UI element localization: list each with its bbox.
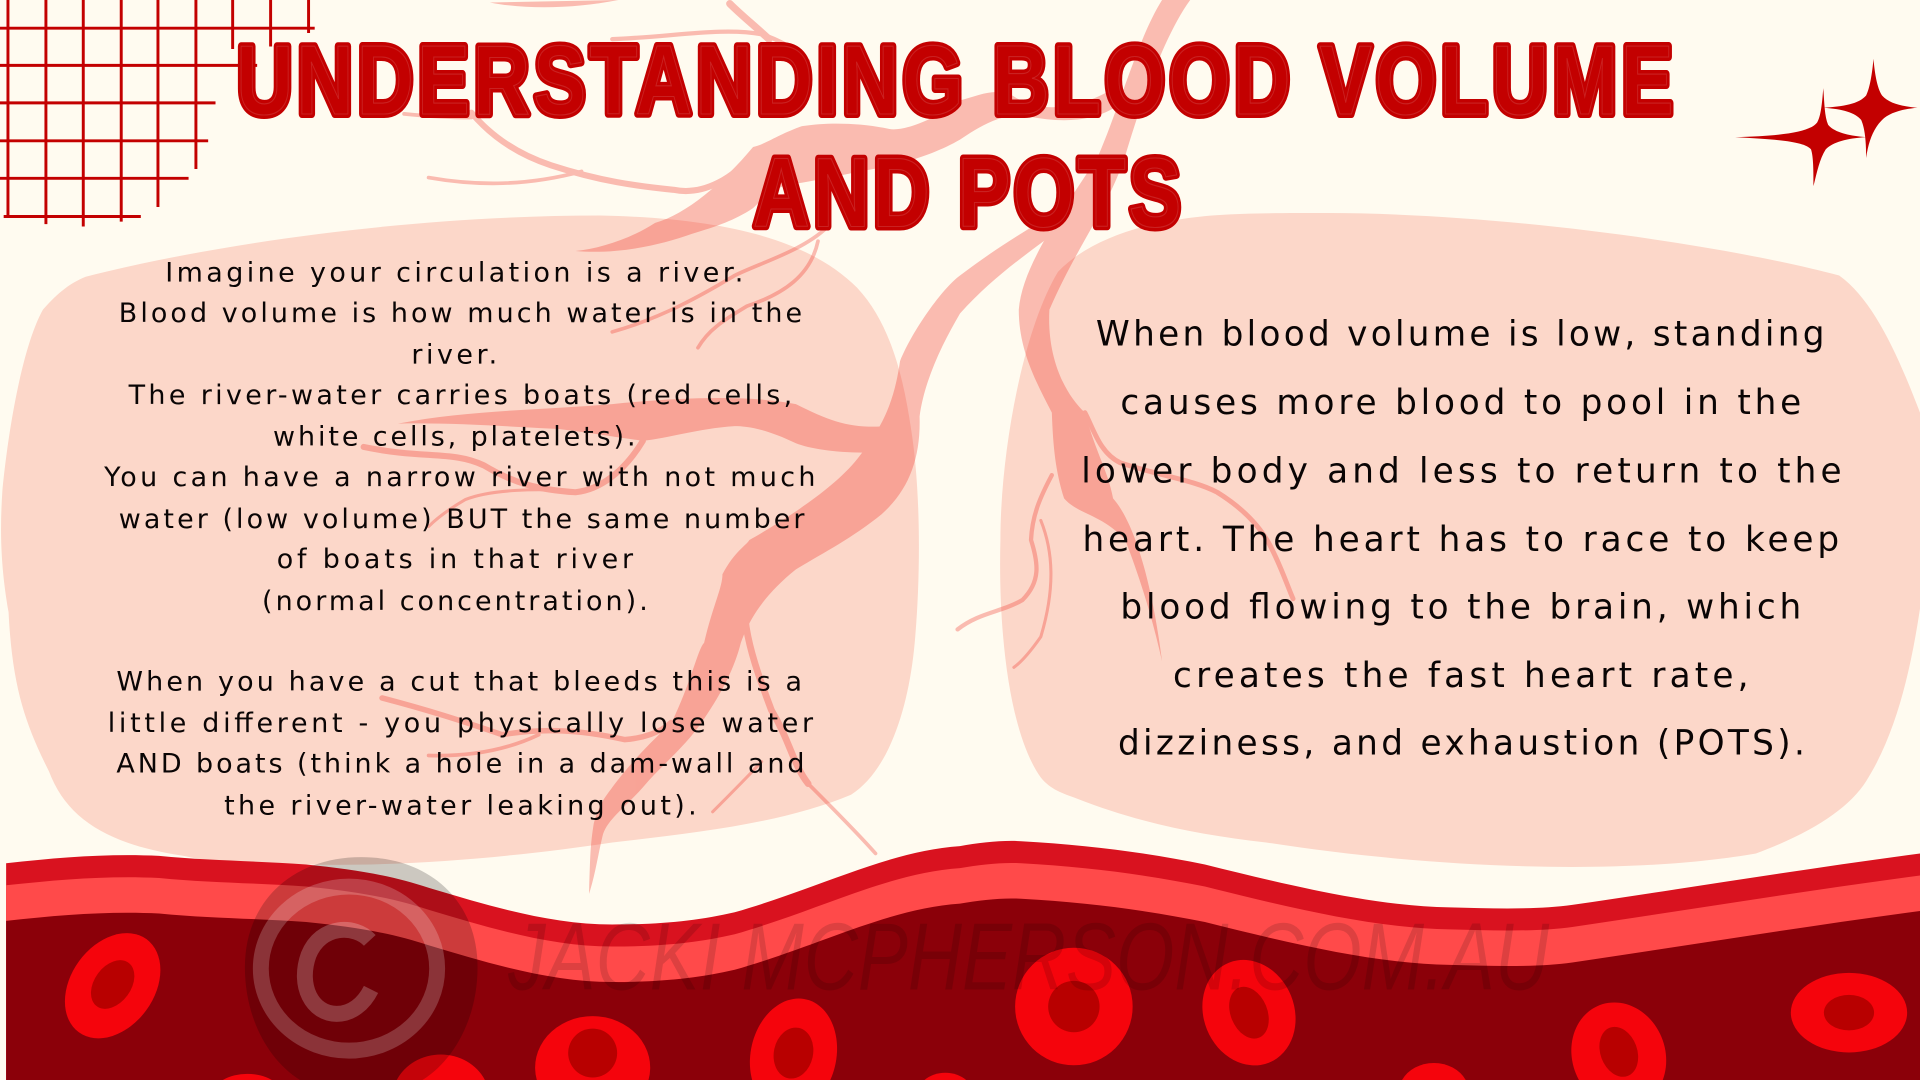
- cell 5: [223, 1074, 272, 1080]
- right text block: heart. The heart has to race to keep: [1082, 520, 1839, 560]
- watermark: site name: JACKI MCPHERSON.COM.AU: [507, 904, 1550, 1010]
- panel: left text blob: [1, 216, 919, 865]
- right text block: When blood volume is low, standing: [1096, 314, 1824, 354]
- left text block: the river-water leaking out).: [224, 790, 697, 821]
- vein: thin branches lower left: [364, 441, 876, 853]
- cell 1: [45, 915, 180, 1057]
- left text block: AND boats (think a hole in a dam-wall and: [116, 749, 804, 780]
- title line 2: AND POTS: [753, 138, 1181, 248]
- vessel lumen: [6, 898, 1920, 1080]
- cell 11: [924, 1073, 966, 1080]
- right text block: lower body and less to return to the: [1081, 451, 1842, 491]
- cell 9: [1791, 973, 1907, 1052]
- right text block: creates the fast heart rate,: [1173, 656, 1749, 696]
- vein: upper left band: [576, 88, 1114, 252]
- right text block: [1081, 314, 1842, 763]
- vessel wall inner: [6, 863, 1920, 1080]
- title line 2: AND POTS: [753, 138, 1181, 248]
- vein: thin branches right: [958, 413, 1293, 667]
- left text block: When you have a cut that bleeds this is a: [116, 667, 802, 698]
- left text block: The river-water carries boats (red cells,: [128, 380, 792, 411]
- red blood cells: [45, 915, 1907, 1080]
- vein: small top branch: [490, 0, 618, 7]
- icon: sparkles: [1735, 59, 1918, 186]
- cell 6: [1015, 948, 1133, 1065]
- left text block: You can have a narrow river with not much: [103, 462, 816, 493]
- title line 1: UNDERSTANDING BLOOD VOLUME: [236, 26, 1673, 135]
- left text block: of boats in that river: [277, 544, 634, 575]
- left text block: [103, 258, 816, 821]
- veins: branching blood vessels: [364, 0, 1293, 894]
- cell 2: [535, 1016, 650, 1080]
- vein: thin branches upper: [404, 4, 827, 348]
- title: [236, 26, 1673, 248]
- cell 3: [750, 998, 837, 1080]
- cell 7: [1187, 946, 1311, 1080]
- cell 4: [397, 1054, 485, 1080]
- left text block: white cells, platelets).: [273, 422, 636, 453]
- vessel wall outer: [6, 841, 1920, 1080]
- vein: main right trunk: [1019, 0, 1190, 661]
- right text block: dizziness, and exhaustion (POTS).: [1118, 723, 1805, 763]
- cell 8: [1571, 1002, 1666, 1080]
- left text block: Blood volume is how much water is in the: [119, 298, 802, 329]
- left text block: little different - you physically lose water: [108, 708, 814, 739]
- title line 1: UNDERSTANDING BLOOD VOLUME: [236, 26, 1673, 135]
- cell 10: [1402, 1063, 1466, 1080]
- left text block: water (low volume) BUT the same number: [119, 504, 805, 535]
- left text block: river.: [411, 340, 497, 371]
- left text block: Imagine your circulation is a river.: [165, 258, 743, 289]
- vein: left mid branch: [398, 398, 894, 453]
- panel: right text blob: [1000, 213, 1920, 867]
- right text block: blood flowing to the brain, which: [1120, 587, 1801, 627]
- left text block: (normal concentration).: [262, 586, 648, 617]
- vein: diagonal trunk down to left panel: [589, 184, 1108, 894]
- blood vessel band: [6, 841, 1920, 1080]
- right text block: causes more blood to pool in the: [1120, 383, 1801, 423]
- watermark: copyright symbol: [245, 857, 478, 1080]
- decorative grid top-left: [0, 0, 315, 227]
